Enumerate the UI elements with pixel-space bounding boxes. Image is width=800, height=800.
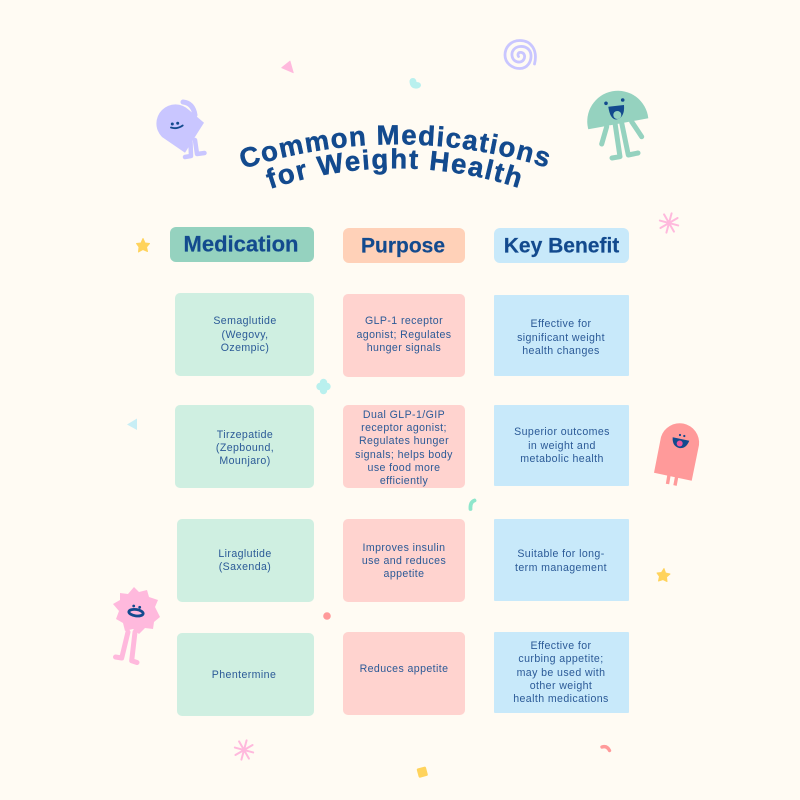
title: Common Medications [240,125,550,167]
cell: curbing [494,632,629,713]
cell: Dual GLP-1/GIP: Regulates hunger [359,435,449,447]
icon: yellow star left [136,238,150,252]
cell: curbing: may be used with [517,667,605,679]
cell: Tirzepatide: (Zepbound, [216,442,274,454]
cell: curbing: Effective for [531,640,592,652]
cell: insulin: appetite [384,568,424,580]
cell: Tirzepatide: Tirzepatide [217,429,273,441]
column: purpose [343,228,465,715]
cell: GLP-1: GLP-1 receptor [365,315,443,327]
header: Key Benefit: Key Benefit [504,234,619,258]
header: Key Benefit [494,228,629,263]
cell: Tirzepatide [175,405,314,488]
cell: Dual GLP-1/GIP: efficiently [380,475,428,487]
cell: long-term: Suitable for long- [517,548,605,560]
cell: long-term: term management [515,562,607,574]
cell: insulin [343,519,465,602]
icon: yellow square [416,766,428,778]
icon: purple spiral [505,40,535,68]
icon: green arc [470,500,474,509]
cell: superior: metabolic health [520,453,604,465]
cell: Dual GLP-1/GIP: use food more [368,462,440,474]
cell: Semaglutide: Semaglutide [213,315,277,327]
cell: reduces appetite [343,632,465,715]
cell: superior [494,405,629,486]
icon: pink asterisk bottom [232,738,256,762]
cell: Liraglutide [177,519,314,602]
cell: curbing: health medications [513,693,609,705]
cell: significant: health changes [522,345,600,357]
cell: reduces appetite: Reduces appetite [360,663,448,675]
cell: significant: Effective for [531,318,592,330]
cell: long-term [494,519,629,601]
cell: curbing: curbing appetite; [518,653,604,665]
header: Medication [170,227,314,262]
cell: significant: significant weight [517,332,605,344]
header: Purpose: Purpose [361,234,445,258]
cell: Liraglutide: Liraglutide [218,548,272,560]
cell: Semaglutide: Ozempic) [221,342,269,354]
column: medication [170,227,314,716]
cell: Dual GLP-1/GIP: Dual GLP-1/GIP [363,409,445,421]
cell: Tirzepatide: Mounjaro) [219,455,271,467]
header: Purpose [343,228,465,263]
icon: teal clover [316,379,331,394]
cell: GLP-1 [343,294,465,377]
cell: Liraglutide: (Saxenda) [219,561,271,573]
title [240,125,550,188]
cell: superior: in weight and [528,440,596,452]
icon: teal heart [410,78,421,89]
cell: Dual GLP-1/GIP: receptor agonist; [361,422,447,434]
character: green jellyfish [587,91,648,158]
cell: superior: Superior outcomes [514,426,610,438]
cell: significant [494,295,629,376]
icon: light blue triangle [127,418,137,430]
cell: insulin: use and reduces [362,555,446,567]
icon: coral arc [602,747,610,750]
character: coral ghost [654,423,699,486]
cell: Dual GLP-1/GIP [343,405,465,488]
cell: curbing: other weight [530,680,592,692]
icon: pink asterisk top right [657,211,681,235]
cell: Semaglutide [175,293,314,376]
character: purple blob [156,102,204,157]
cell: Semaglutide: (Wegovy, [222,329,268,341]
cell: Dual GLP-1/GIP: signals; helps body [355,449,453,461]
icon: yellow star right [657,568,670,582]
cell: GLP-1: hunger signals [367,342,441,354]
header: Medication: Medication [184,232,298,256]
cell: Phentermine [177,633,314,716]
icon: coral dot [323,612,331,620]
cell: GLP-1: agonist; Regulates [357,329,451,341]
column: key benefit [494,228,629,713]
title: for Weight Health [266,148,520,188]
icon: pink triangle [282,61,293,73]
character: pink spiky star [113,587,160,662]
cell: Phentermine: Phentermine [212,669,276,681]
cell: insulin: Improves insulin [363,542,445,554]
